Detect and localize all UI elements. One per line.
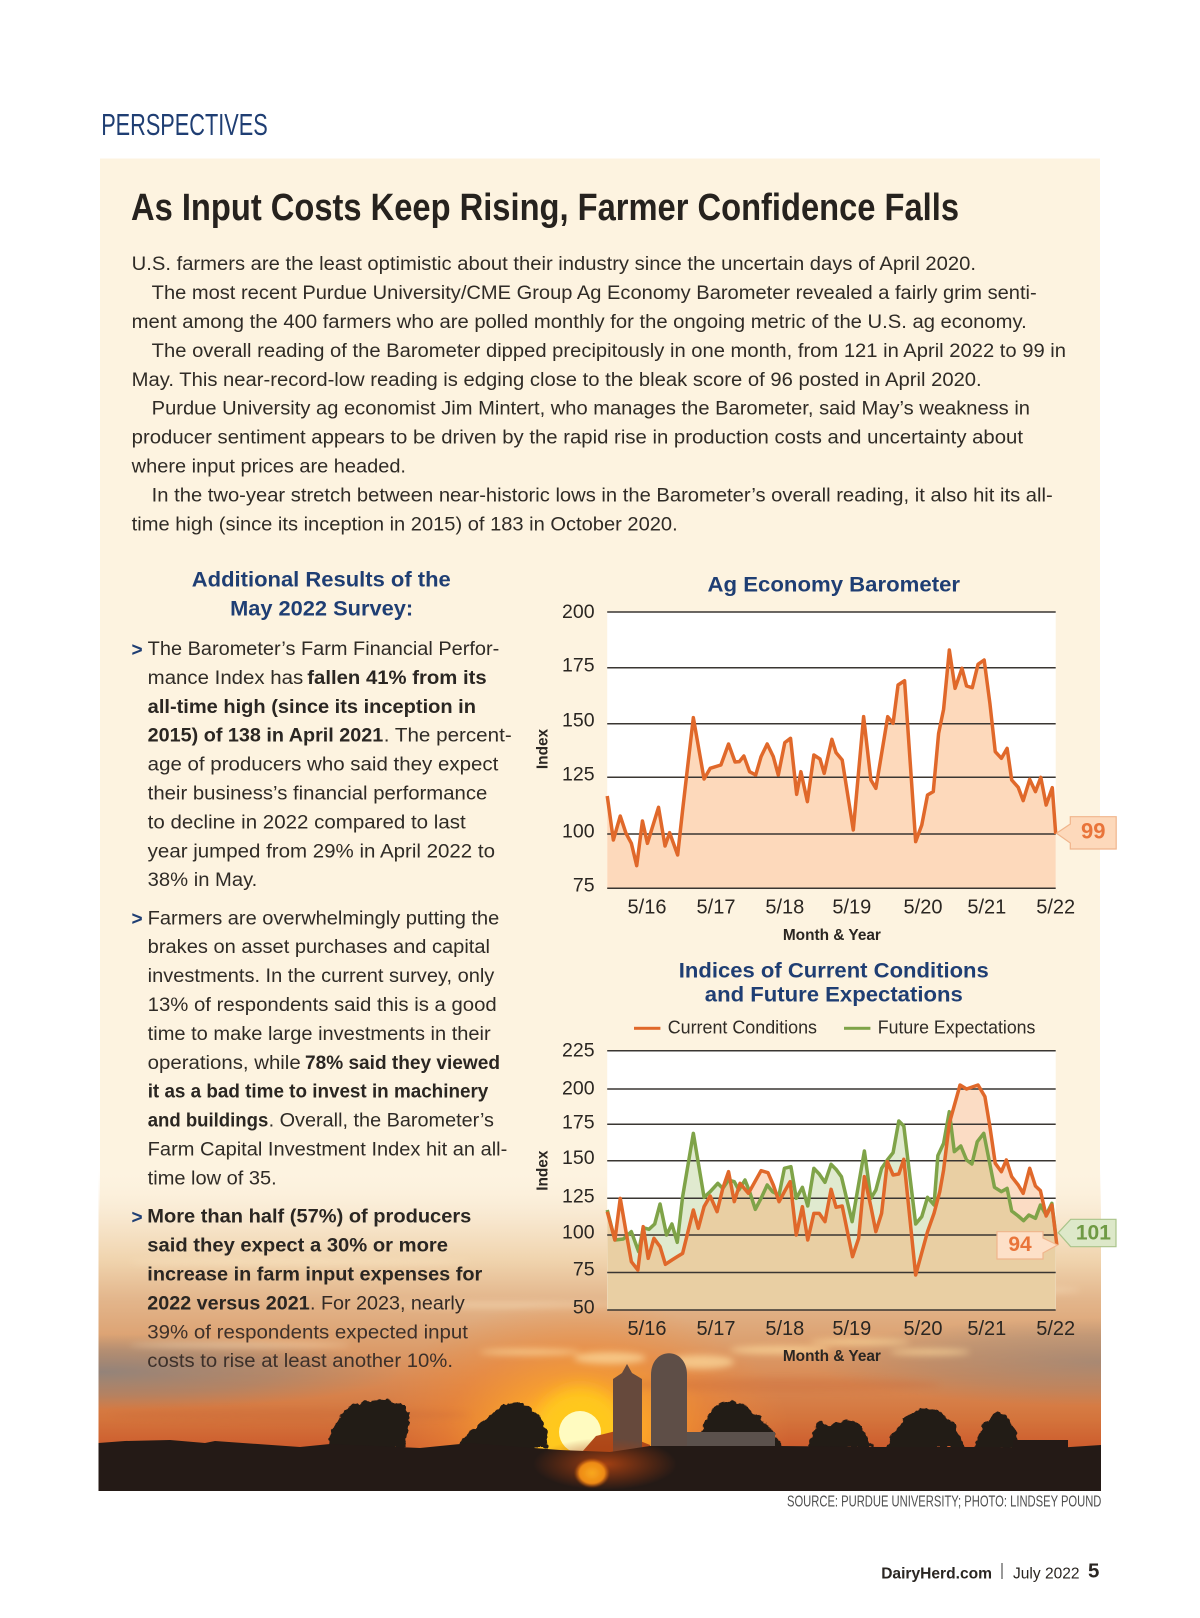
icon: silos — [613, 1353, 687, 1452]
bullet: farm financial performance: age of producers who said they expect — [148, 755, 499, 776]
bullet: asset purchases: and buildings — [148, 1111, 268, 1132]
bullet: asset purchases: Farm Capital Investment Index hit an all- — [148, 1140, 507, 1160]
bullet: farm financial performance: mance Index has — [148, 668, 303, 689]
x axis labels — [628, 896, 1075, 918]
x axis labels: 5/17 — [697, 896, 735, 918]
bullet: farm financial performance: The Barometer’s Farm Financial Perfor- — [148, 639, 499, 660]
x axis labels: 5/16 — [628, 1318, 666, 1340]
x axis labels: 5/21 — [967, 896, 1006, 918]
text block: intro: Purdue University ag economist Jim Mintert, who manages the Barometer, said May’s weakness in — [152, 399, 1030, 420]
x axis labels: 5/19 — [832, 896, 871, 918]
panel: cream background — [100, 158, 1100, 1318]
bullet: input expenses: > — [132, 1208, 143, 1228]
text block: intro: The overall reading of the Barometer dipped precipitously in one month, from 121 in April 2022 to 99 in — [152, 341, 1066, 362]
bullet: farm financial performance: 38% in May. — [148, 870, 257, 891]
y axis labels: 150 — [562, 710, 595, 732]
bullet: farm financial performance: fallen 41% from its — [307, 668, 487, 689]
y axis labels: 150 — [562, 1147, 595, 1169]
y axis labels: 100 — [562, 1221, 595, 1243]
callout: 101: 101 — [1076, 1221, 1111, 1244]
heading: additional results: May 2022 Survey: — [230, 597, 413, 621]
chart title — [679, 958, 989, 1007]
bullet: asset purchases: time low of 35. — [148, 1168, 277, 1189]
icon: lens flare — [574, 1458, 610, 1488]
bullet: farm financial performance: 2015) of 138 in April 2021 — [148, 726, 384, 747]
text block: intro: time high (since its inception in 2015) of 183 in October 2020. — [132, 514, 678, 535]
text block: intro: ment among the 400 farmers who are polled monthly for the ongoing metric of the U.S. ag economy. — [132, 312, 1027, 333]
x axis labels: 5/20 — [904, 896, 942, 918]
barn — [687, 1432, 775, 1446]
footer — [881, 1561, 1099, 1583]
bullet: farm financial performance: all-time high (since its inception in — [148, 697, 476, 718]
photo: sunset with silos — [98, 1181, 1101, 1491]
footer: July 2022 — [1013, 1565, 1080, 1582]
y axis title: Index — [534, 728, 552, 769]
bullet: input expenses: increase in farm input expenses for — [147, 1264, 483, 1286]
x axis labels: 5/17 — [697, 1318, 735, 1340]
heading: additional results — [192, 568, 451, 621]
bullet: input expenses: 2022 versus 2021 — [147, 1293, 310, 1314]
bullet: asset purchases: brakes on asset purchases and capital — [148, 937, 490, 958]
text block: intro: In the two-year stretch between near-historic lows in the Barometer’s overall reading, it also hit its all- — [152, 485, 1053, 506]
bullet: input expenses: . For 2023, nearly — [310, 1293, 465, 1314]
legend: Future Expectations — [878, 1017, 1035, 1037]
text block: intro: May. This near-record-low reading is edging close to the bleak score of 96 posted in April 2020. — [132, 370, 982, 391]
bullet: input expenses — [132, 1207, 483, 1372]
legend — [634, 1017, 1035, 1037]
x axis labels — [628, 1318, 1075, 1340]
x axis labels: 5/21 — [967, 1318, 1006, 1340]
x axis labels: 5/22 — [1036, 896, 1075, 918]
x axis labels: 5/20 — [904, 1318, 942, 1340]
area: barometer — [607, 650, 1056, 888]
text block: intro: The most recent Purdue University/CME Group Ag Economy Barometer revealed a fairly grim senti- — [152, 283, 1037, 304]
bullet: asset purchases: time to make large investments in their — [148, 1024, 491, 1045]
silhouette: ground and trees — [98, 1400, 1101, 1491]
bullet: input expenses: costs to rise at least another 10%. — [147, 1351, 453, 1372]
callout: 99 — [1056, 817, 1116, 849]
x axis labels: 5/18 — [765, 896, 804, 918]
y axis labels: 200 — [562, 601, 595, 623]
y axis labels — [562, 601, 595, 897]
bullet: input expenses: More than half (57%) of producers — [147, 1207, 471, 1228]
x axis labels: 5/22 — [1036, 1318, 1075, 1340]
bullet: asset purchases: > — [132, 909, 143, 930]
y axis labels: 50 — [573, 1296, 595, 1318]
legend: Current Conditions — [668, 1017, 817, 1037]
bullet: farm financial performance: to decline in 2022 compared to last — [148, 812, 466, 833]
bullet: asset purchases: . Overall, the Barometer’s — [269, 1111, 494, 1132]
bullet: farm financial performance: . The percent- — [384, 726, 512, 747]
text block: intro — [131, 254, 1066, 535]
bullet: farm financial performance: > — [132, 640, 143, 661]
text block: intro: U.S. farmers are the least optimistic about their industry since the uncertain days of April 2020. — [132, 254, 976, 275]
bullet: asset purchases: investments. In the current survey, only — [148, 966, 495, 987]
bullet: asset purchases: Farmers are overwhelmingly putting the — [148, 908, 499, 929]
callout: 94: 94 — [1008, 1233, 1032, 1256]
bullet: asset purchases — [132, 908, 507, 1189]
y axis labels: 125 — [562, 764, 595, 786]
text block: intro: where input prices are headed. — [131, 456, 406, 478]
text block: intro: producer sentiment appears to be driven by the rapid rise in production costs and uncertainty about — [132, 428, 1024, 449]
bullet: farm financial performance: year jumped from 29% in April 2022 to — [148, 841, 495, 862]
x axis labels: 5/18 — [765, 1318, 804, 1340]
y axis title: Index — [534, 1150, 552, 1191]
bullet: asset purchases: it as a bad time to invest in machinery — [148, 1082, 489, 1103]
bullet: input expenses: 39% of respondents expected input — [147, 1322, 469, 1343]
bullet: asset purchases: operations, while — [148, 1053, 301, 1074]
bullet: asset purchases: 13% of respondents said this is a good — [148, 995, 497, 1016]
callout: 94 — [997, 1232, 1058, 1259]
y axis labels: 100 — [562, 820, 595, 842]
callout: 99: 99 — [1081, 818, 1105, 843]
x axis labels: 5/16 — [628, 896, 666, 918]
y axis labels: 125 — [562, 1185, 595, 1207]
title: As Input Costs Keep Rising, Farmer Confidence Falls — [131, 187, 959, 229]
chart: Indices of Current Conditions and Future Expectations — [534, 958, 1116, 1365]
y axis labels: 175 — [562, 1111, 595, 1133]
bullet: farm financial performance — [132, 639, 512, 891]
y axis labels: 75 — [573, 1259, 595, 1281]
chart title: and Future Expectations — [705, 983, 963, 1007]
heading: additional results: Additional Results of the — [192, 568, 451, 592]
bullet: asset purchases: 78% said they viewed — [305, 1053, 500, 1074]
footer: 5 — [1088, 1561, 1099, 1583]
chart: Ag Economy Barometer — [534, 573, 1116, 944]
y axis labels: 175 — [562, 655, 595, 677]
chart title: Ag Economy Barometer — [708, 573, 961, 597]
y axis labels: 75 — [573, 875, 595, 897]
line: barometer — [607, 650, 1056, 866]
chart title: Indices of Current Conditions — [679, 958, 989, 982]
x axis title: Month & Year — [783, 1348, 881, 1365]
x axis title: Month & Year — [783, 927, 881, 944]
bullet: farm financial performance: their business’s financial performance — [148, 784, 487, 804]
y axis labels: 225 — [562, 1040, 595, 1062]
lines: future expectations and current conditions — [607, 1085, 1057, 1275]
y axis labels — [562, 1040, 595, 1318]
bullet: input expenses: said they expect a 30% or more — [147, 1236, 448, 1257]
y axis labels: 200 — [562, 1077, 595, 1099]
callout: 101 — [1058, 1219, 1116, 1247]
footer: DairyHerd.com — [881, 1565, 992, 1582]
x axis labels: 5/19 — [832, 1318, 871, 1340]
areas: both indices — [607, 1085, 1056, 1310]
section label: PERSPECTIVES — [101, 107, 268, 142]
icon: sun — [536, 1382, 613, 1451]
